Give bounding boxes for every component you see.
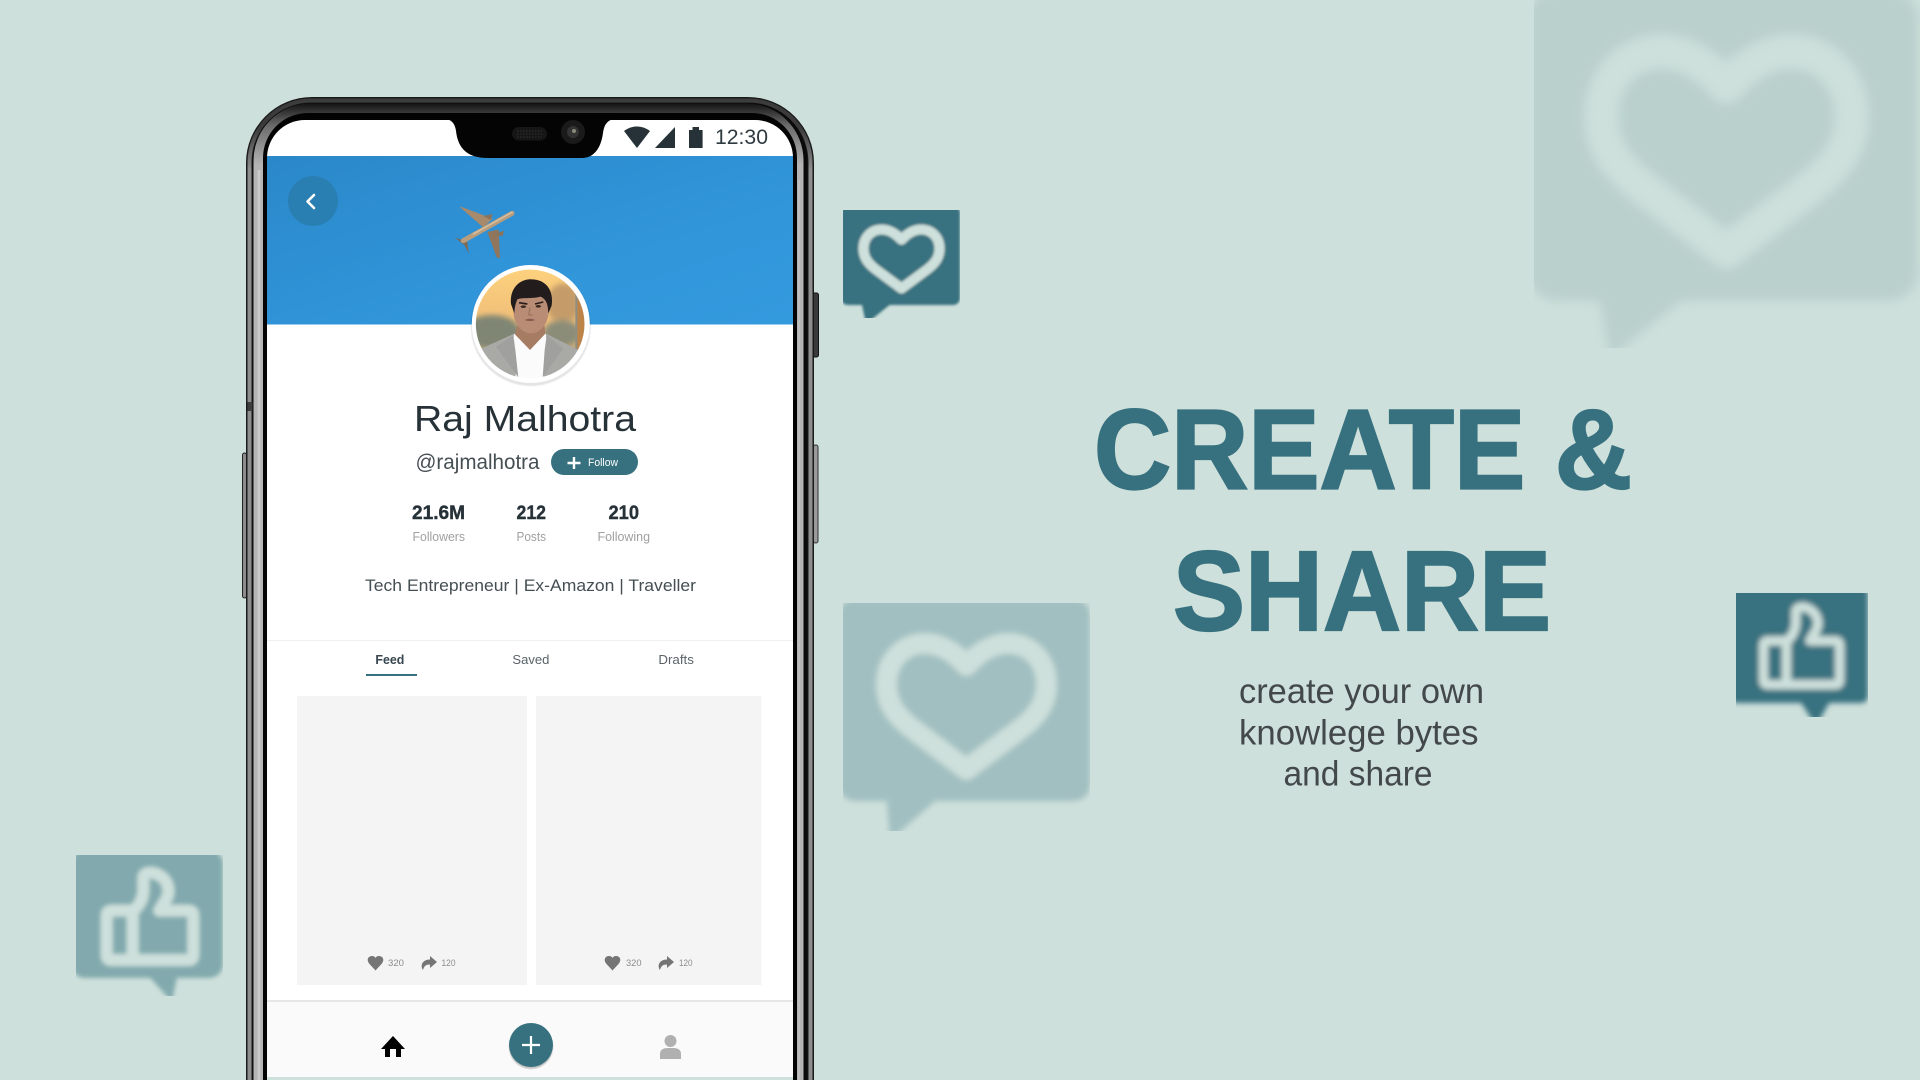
bottom navigation <box>267 1000 793 1080</box>
tabs <box>366 652 694 676</box>
icon: like <box>605 956 620 970</box>
profile handle: @rajmalhotra <box>416 451 540 474</box>
feed card 1: 120 <box>442 958 456 969</box>
subtitle: create your own <box>1239 672 1484 711</box>
icon: home <box>381 1036 405 1057</box>
icon: airplane <box>455 207 512 258</box>
feed card 2 <box>536 696 762 985</box>
icon: dark thumbs-up bubble, right <box>1736 593 1868 717</box>
follow button <box>551 449 638 475</box>
stats: followers: 21.6M <box>412 502 465 524</box>
icon: medium heart bubble <box>839 599 1090 840</box>
stats: posts <box>516 502 546 544</box>
subtitle: knowlege bytes <box>1239 714 1478 752</box>
subtitle: and share <box>1284 754 1432 794</box>
tabs: Feed <box>375 652 404 667</box>
subtitle <box>1239 672 1484 794</box>
icon: large faded heart bubble, top right <box>1528 0 1918 358</box>
icon: share <box>659 956 674 970</box>
phone frame <box>246 97 814 1080</box>
title <box>1094 387 1632 654</box>
stats: posts: Posts <box>516 530 546 544</box>
cover photo: sky <box>267 156 793 324</box>
notch <box>444 119 613 158</box>
stats: following <box>598 502 650 544</box>
status bar: 12:30 <box>715 125 768 149</box>
feed card 2: 320 <box>626 958 642 969</box>
phone screen <box>267 119 793 1080</box>
stats: followers: Followers <box>412 530 465 544</box>
feed card 1 <box>297 696 527 985</box>
icon: like <box>368 956 383 970</box>
title: SHARE <box>1173 528 1551 654</box>
tabs: Drafts <box>658 652 694 667</box>
icon: profile <box>660 1035 681 1059</box>
icon: share <box>422 956 437 970</box>
tabs: Saved <box>512 652 549 667</box>
bio: Tech Entrepreneur | Ex-Amazon | Traveller <box>365 576 696 595</box>
follow button: Follow <box>588 457 618 469</box>
stats: following: 210 <box>608 502 639 524</box>
feed card 2: 120 <box>679 958 692 969</box>
phone side buttons <box>242 293 818 598</box>
icon: small dark heart bubble <box>843 210 960 318</box>
add button <box>509 1023 553 1069</box>
stats: posts: 212 <box>516 502 546 524</box>
status bar <box>624 125 768 149</box>
icon: faded thumbs-up bubble, bottom left <box>76 855 223 996</box>
avatar <box>463 265 591 386</box>
feed card 1: 320 <box>388 958 404 969</box>
profile name: Raj Malhotra <box>414 398 637 439</box>
title: CREATE & <box>1094 387 1632 513</box>
back button <box>288 176 338 226</box>
stats: followers <box>412 502 465 544</box>
stats: following: Following <box>598 530 650 544</box>
phone mockup <box>242 97 818 1080</box>
